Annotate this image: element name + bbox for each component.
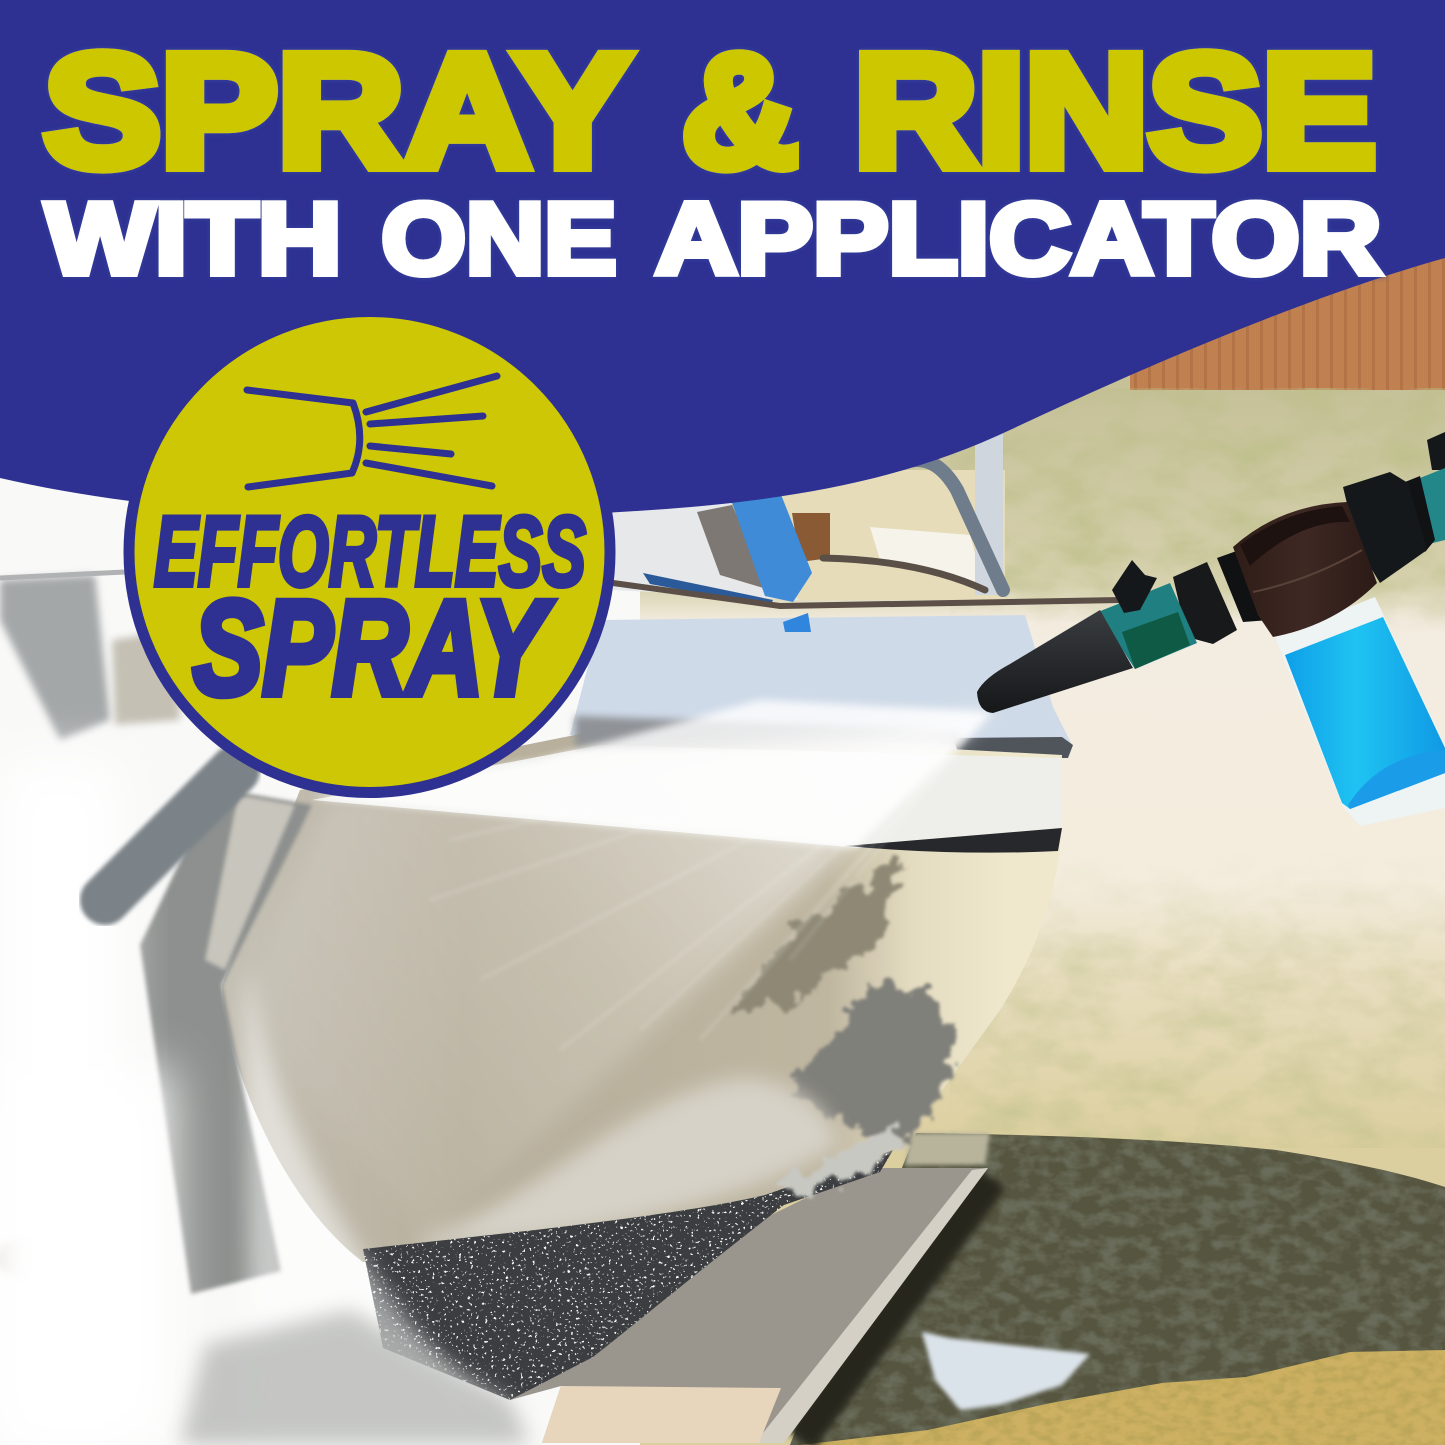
brown cap [1233, 502, 1377, 637]
icon: spray nozzle [247, 376, 497, 487]
fence [1130, 240, 1445, 390]
title line 1: SPRAY [44, 21, 631, 200]
badge text: EFFORTLESS [154, 496, 586, 606]
hazy dome on hull [420, 1078, 838, 1250]
black nozzle tip [977, 610, 1133, 713]
cap ring line [1253, 550, 1362, 592]
sunny grass corner [800, 1350, 1445, 1445]
teal hose connector [1415, 468, 1445, 545]
grey rim left [575, 716, 960, 748]
badge: effortless spray [129, 312, 610, 792]
spray top sheet [312, 700, 993, 848]
title line 1: RINSE [854, 21, 1376, 200]
blue header wave [0, 0, 1445, 518]
railing [823, 460, 1003, 590]
title line 2: ONE [382, 184, 616, 296]
hull [222, 730, 1062, 1262]
front rail [613, 583, 1120, 606]
applicator product [977, 432, 1445, 826]
badge text [154, 496, 586, 723]
spray streaks [430, 716, 985, 1050]
white hull band [312, 745, 1062, 848]
puddle [922, 1332, 1090, 1410]
stone strip on stem [205, 795, 295, 970]
deck rim [953, 737, 1073, 758]
wooden board [510, 1168, 988, 1443]
right black nut [1343, 472, 1427, 583]
title line 2: APPLICATOR [656, 184, 1382, 296]
badge text: SPRAY [193, 574, 553, 723]
title [44, 21, 1382, 296]
rear structures [0, 575, 110, 740]
title line 2: WITH [46, 184, 342, 296]
bottle glass [1275, 597, 1445, 826]
ground mottling [950, 388, 1445, 1148]
title line 2 [46, 184, 1382, 296]
top hose fitting [1427, 432, 1445, 470]
left boat clutter [613, 497, 800, 600]
bottle liquid [1285, 617, 1445, 809]
silver post [975, 430, 1003, 595]
gap shadow under board [800, 1178, 992, 1440]
title line 1 [44, 21, 1376, 200]
black ring [1405, 476, 1435, 552]
splash at base [180, 1310, 530, 1445]
bow stem [140, 788, 312, 1294]
liquid base [1348, 750, 1445, 809]
bow handle [105, 770, 235, 900]
worn hull patches [733, 857, 899, 1010]
lit block beside board [905, 1133, 990, 1165]
left water sheet [245, 960, 530, 1445]
teal nozzle body [1098, 583, 1197, 669]
title line 1: & [682, 21, 798, 200]
dark hull underside [363, 1150, 893, 1400]
soft smudge [0, 1238, 60, 1278]
black waterline [845, 828, 1062, 853]
black nut [1173, 562, 1237, 644]
knob [1112, 560, 1157, 613]
rear rail [0, 572, 125, 578]
spray fan [240, 712, 990, 1240]
shadow on grass [790, 1133, 1445, 1445]
boat interior [780, 470, 1005, 600]
crust at hull bottom [770, 1125, 905, 1195]
blue seat strip [730, 492, 812, 602]
deck [570, 615, 1073, 747]
neck [1217, 548, 1270, 622]
white left haze [0, 440, 640, 1445]
left mist [0, 760, 120, 1445]
